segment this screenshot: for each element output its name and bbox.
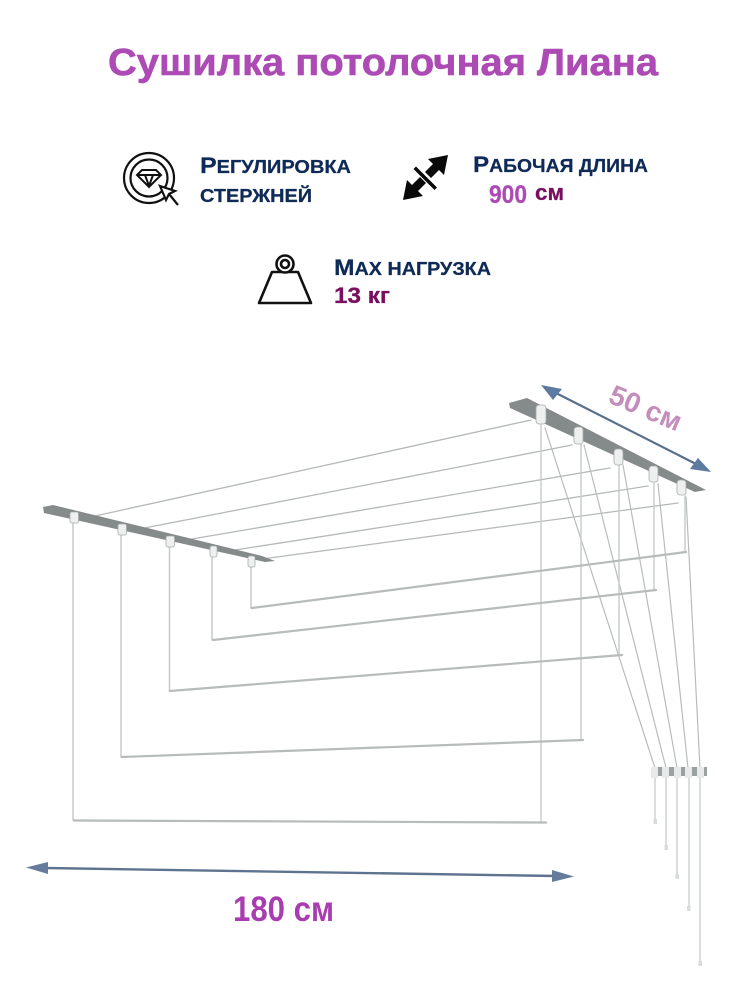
text: working length: 900	[489, 181, 527, 209]
arrow: width 50 cm	[541, 385, 711, 472]
title: Сушилка потолочная Лиана	[108, 42, 659, 84]
label: 50 cm: 50 см	[605, 379, 687, 437]
cord lock	[651, 767, 707, 778]
pull cords	[655, 778, 700, 962]
arrow: length 180 cm	[26, 862, 574, 882]
text: rod adjustment: РЕГУЛИРОВКА	[200, 153, 351, 178]
icon: double arrow	[403, 155, 448, 200]
left ceiling bar	[43, 505, 275, 567]
dryer illustration	[73, 420, 700, 962]
drying bars	[74, 552, 686, 822]
text: max load	[334, 255, 491, 308]
text: max load: 13 кг	[334, 283, 390, 308]
left vertical rods	[73, 522, 251, 820]
right ceiling bar	[509, 398, 706, 495]
text: rod adjustment: СТЕРЖНЕЙ	[200, 185, 312, 206]
text: max load: МАХ НАГРУЗКА	[334, 255, 491, 280]
text: working length: РАБОЧАЯ ДЛИНА	[473, 152, 648, 177]
right vertical rods	[541, 425, 685, 822]
text: working length	[473, 152, 648, 209]
long cables between ceiling bars	[86, 420, 678, 559]
cord weights	[654, 819, 702, 966]
text: working length: см	[535, 180, 564, 205]
icon: weight	[259, 256, 311, 303]
label: 180 cm: 180 см	[233, 890, 334, 929]
text: rod adjustment	[200, 153, 351, 206]
icon: diamond target with cursor	[124, 153, 178, 205]
diagonal cables to lock	[545, 428, 700, 768]
